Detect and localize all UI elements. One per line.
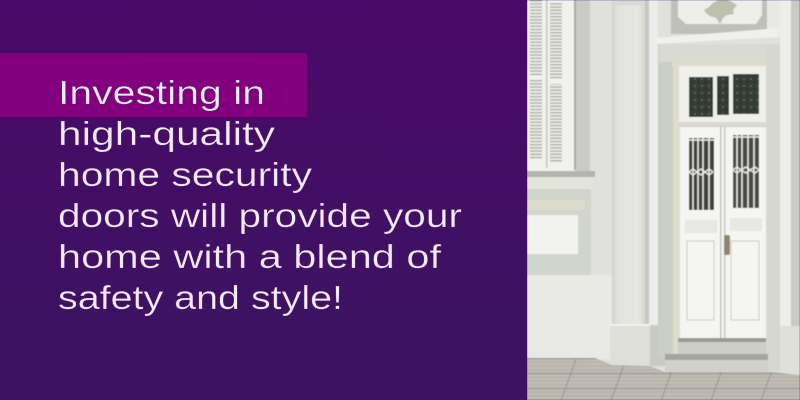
ledge and wall panel under the window [527,171,612,359]
column: pilaster and base [610,0,670,366]
heading: main message text: safety and style! [58,280,343,317]
door: double white door [680,127,766,339]
heading: main message text: doors will provide your [58,198,462,235]
photo: white front door of a house [527,0,800,400]
steps [665,338,768,373]
heading: main message text: Investing in [58,75,265,112]
panel: purple background [0,0,527,400]
heading: main message text: home security [58,157,312,194]
heading: main message text: high-quality [58,116,275,153]
pediment with ornament [654,0,780,44]
heading: main message text: home with a blend of [58,239,442,276]
heading: main message text [58,75,462,317]
door surround [658,0,800,374]
transom window [679,66,766,126]
accent bar: magenta highlight [0,53,307,117]
pavement [527,358,800,400]
shutters: window with white louvred shutters [527,0,590,172]
